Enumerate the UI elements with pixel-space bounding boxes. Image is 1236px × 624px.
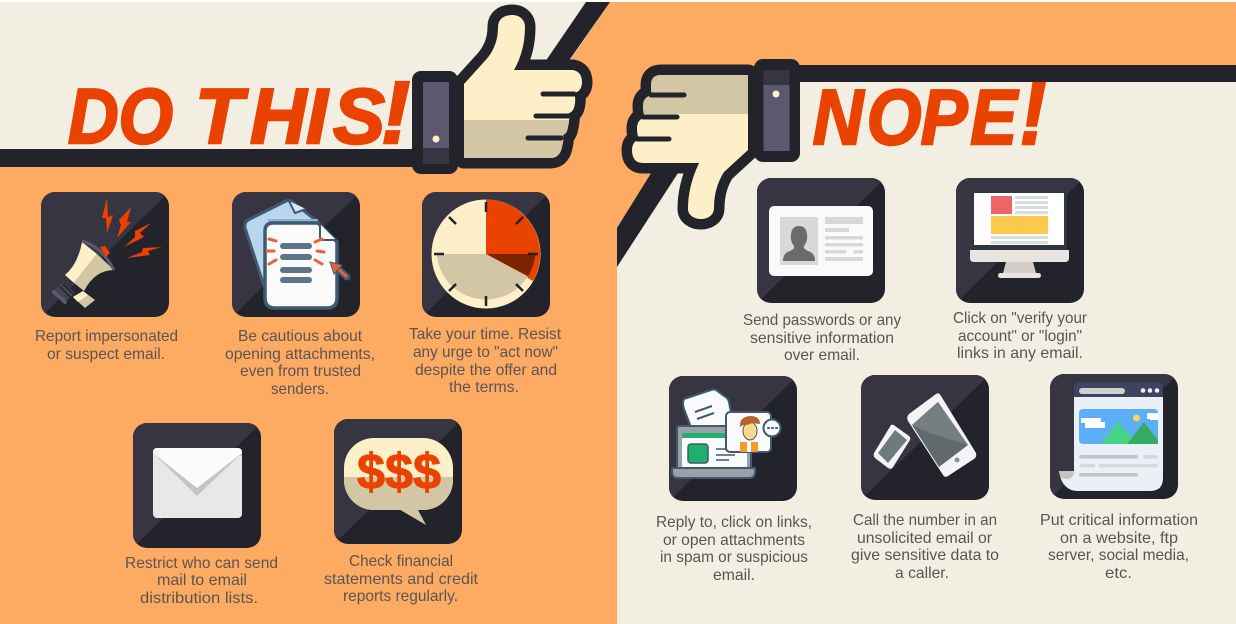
icon: web page scroll (1050, 374, 1178, 499)
icon: phones (861, 375, 989, 500)
text: report impersonated: Report impersonated (35, 328, 178, 345)
text: send passwords: Send passwords or any (743, 312, 901, 329)
heading: DO THIS!: ! (381, 63, 410, 162)
text: be cautious: senders. (271, 381, 329, 398)
text: send passwords: over email. (784, 347, 860, 364)
text: click on verify: Click on "verify your (953, 310, 1088, 327)
icon: thumbs up (412, 15, 582, 174)
text: reply to: email. (713, 567, 755, 584)
text: send passwords: sensitive information (750, 330, 894, 347)
panel: check financial statements (324, 419, 479, 605)
icon: money speech bubble: $$$ (357, 444, 441, 500)
text: click on verify (953, 310, 1088, 362)
text: restrict (125, 555, 278, 607)
text: report impersonated (35, 328, 178, 363)
text: call the number: give sensitive data to (851, 547, 999, 564)
text: be cautious: Be cautious about (238, 328, 363, 345)
heading: DO THIS!: DO (68, 72, 173, 160)
panel: take your time (409, 192, 562, 396)
text: put critical: etc. (1105, 565, 1132, 582)
text: reply to: Reply to, click on links, (656, 514, 812, 531)
panel: report impersonated email (35, 192, 178, 363)
text: call the number: unsolicited email or (857, 530, 993, 547)
icon: laptop and person (669, 376, 797, 501)
text: click on verify: account" or "login" (958, 328, 1082, 345)
text: put critical: on a website, ftp (1060, 530, 1178, 547)
icon: id card (757, 178, 885, 303)
icon: megaphone (41, 192, 169, 317)
text: put critical: Put critical information (1040, 512, 1198, 529)
panel: cautious about attachments (225, 192, 375, 398)
panel: put critical information (1040, 374, 1198, 582)
icon: thumbs down (632, 59, 800, 219)
text: check financial (324, 553, 479, 605)
heading: NOPE!: NOPE (813, 74, 1019, 161)
text: be cautious (225, 328, 375, 398)
text: check financial: Check financial (349, 553, 453, 570)
text: be cautious: even from trusted (240, 363, 361, 380)
text: call the number (851, 512, 999, 582)
panel: reply to spam (656, 376, 812, 584)
text: reply to: in spam or suspicious (660, 549, 808, 566)
text: reply to: or open attachments (663, 532, 805, 549)
panel: send passwords (743, 178, 901, 364)
text: call the number: Call the number in an (853, 512, 997, 529)
panel: call the number (851, 375, 999, 582)
text: take your time: despite the offer and (415, 362, 557, 379)
icon: documents (232, 192, 360, 317)
text: be cautious: opening attachments, (225, 346, 375, 363)
heading: DO THIS! (68, 63, 410, 162)
text: click on verify: links in any email. (957, 345, 1083, 362)
text: take your time (409, 326, 562, 396)
icon: money speech bubble (334, 419, 462, 544)
text: report impersonated: or suspect email. (47, 346, 165, 363)
text: call the number: a caller. (895, 565, 949, 582)
heading: NOPE!: ! (1020, 64, 1046, 163)
text: check financial: reports regularly. (343, 588, 458, 605)
text: take your time: Take your time. Resist (409, 326, 562, 343)
text: reply to (656, 514, 812, 584)
text: restrict: mail to email (157, 572, 247, 589)
icon: envelope (133, 423, 261, 548)
heading: DO THIS!: THIS (195, 72, 385, 160)
text: put critical: server, social media, (1048, 547, 1189, 564)
text: take your time: the terms. (449, 379, 519, 396)
icon: monitor (956, 178, 1084, 303)
panel: restrict who can send (125, 423, 278, 607)
text: take your time: any urge to "act now" (413, 344, 558, 361)
panel: click on verify (953, 178, 1088, 362)
text: restrict: Restrict who can send (125, 555, 278, 572)
text: check financial: statements and credit (324, 571, 479, 588)
text: put critical (1040, 512, 1198, 582)
text: send passwords (743, 312, 901, 364)
icon: clock (420, 192, 550, 320)
text: restrict: distribution lists. (140, 590, 258, 607)
